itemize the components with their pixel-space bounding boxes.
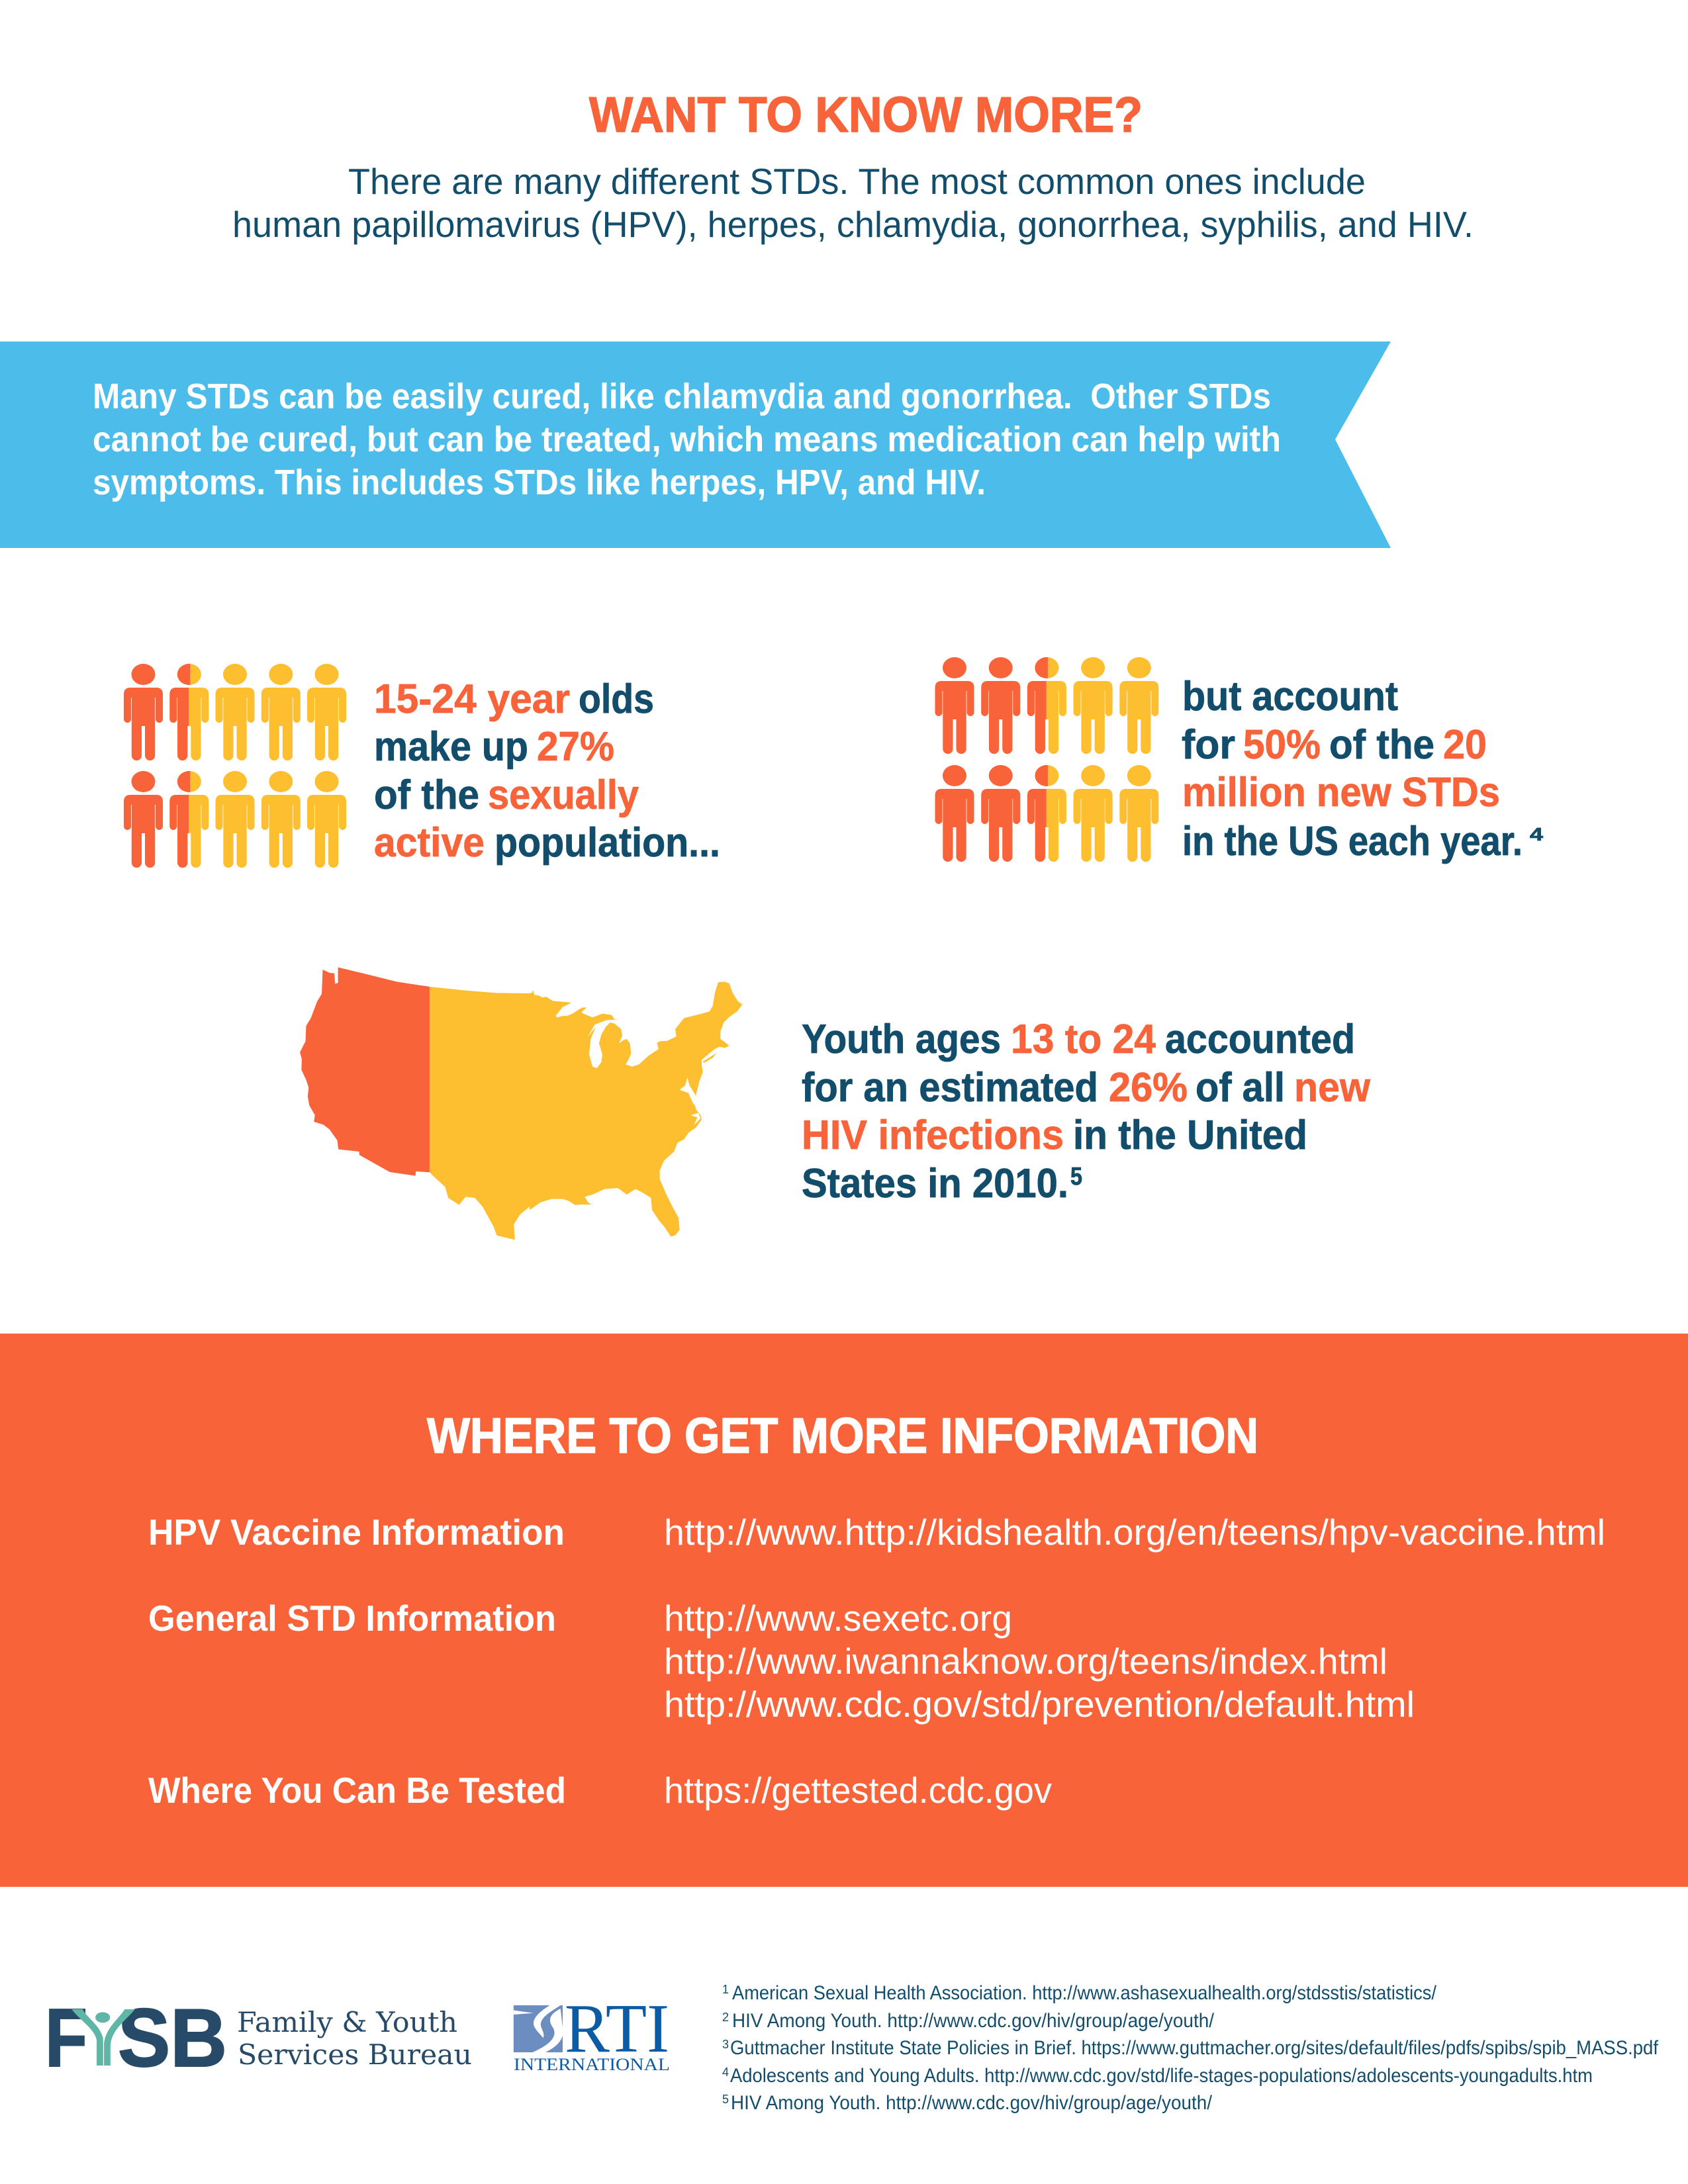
resource links: http://www.iwannaknow.org/teens/index.html — [664, 1641, 1387, 1682]
text: 15-24 year olds stat: 27% — [537, 724, 614, 770]
resource links: http://www.cdc.gov/std/prevention/default.html — [664, 1684, 1415, 1725]
footnotes: HIV Among Youth. http://www.cdc.gov/hiv/group/age/youth/ — [731, 2092, 1213, 2114]
text: youth HIV stat: Youth ages — [802, 1017, 1001, 1062]
text: 15-24 year olds stat: 15-24 year — [374, 676, 570, 722]
resource links: http://www.sexetc.org — [664, 1598, 1012, 1639]
text: youth HIV stat: accounted — [1165, 1017, 1355, 1062]
text: 50 percent of new STDs stat: in the US each year. — [1182, 819, 1523, 864]
banner text: symptoms. This includes STDs like herpes, HPV, and HIV. — [93, 463, 986, 502]
resource links: http://www.http://kidshealth.org/en/teens/hpv-vaccine.html — [664, 1512, 1605, 1553]
footnotes: 5 — [722, 2093, 729, 2106]
text: 15-24 year olds stat: active — [374, 820, 485, 866]
logo: FYSB Family and Youth Services Bureau: Services Bureau — [238, 2038, 472, 2071]
resource links — [664, 1512, 1605, 1811]
text: youth HIV stat: HIV infections — [802, 1113, 1064, 1158]
footnotes: 3 — [722, 2038, 729, 2051]
icon: left people array, 27 percent — [124, 664, 346, 868]
intro text: There are many different STDs. The most common ones include — [348, 161, 1366, 202]
logo: RTI International: RTI — [565, 1989, 669, 2067]
text: 15-24 year olds stat: olds — [579, 676, 654, 722]
text: 50 percent of new STDs stat: 20 — [1443, 722, 1487, 768]
intro text: human papillomavirus (HPV), herpes, chlamydia, gonorrhea, syphilis, and HIV. — [232, 204, 1474, 245]
logo: FYSB Family and Youth Services Bureau: SB — [118, 1993, 227, 2084]
banner text — [93, 377, 1281, 502]
text: 15-24 year olds stat: sexually — [488, 772, 639, 818]
logo: FYSB Family and Youth Services Bureau — [45, 1993, 472, 2084]
logo: FYSB Family and Youth Services Bureau: F — [45, 1993, 87, 2084]
panel: where to get more information — [0, 1334, 1688, 1887]
text: 15-24 year olds stat — [374, 676, 720, 866]
text: 50 percent of new STDs stat: million new STDs — [1182, 770, 1500, 815]
text: youth HIV stat: for an estimated — [802, 1065, 1098, 1111]
footnotes: Adolescents and Young Adults. http://www.cdc.gov/std/life-stages-populations/adolescents-youngadults.htm — [730, 2065, 1593, 2087]
footnotes: 2 — [722, 2011, 729, 2024]
text: youth HIV stat: new — [1294, 1065, 1371, 1111]
text: 50 percent of new STDs stat: 50% — [1243, 722, 1321, 768]
logo: RTI International — [514, 1989, 670, 2074]
text: youth HIV stat: States in 2010. — [802, 1161, 1068, 1206]
text: 50 percent of new STDs stat: of the — [1329, 722, 1434, 768]
logo: RTI International: INTERNATIONAL — [514, 2055, 670, 2074]
footnotes: HIV Among Youth. http://www.cdc.gov/hiv/group/age/youth/ — [732, 2010, 1215, 2032]
text: youth HIV stat: 13 to 24 — [1011, 1017, 1156, 1062]
resource labels — [148, 1512, 566, 1811]
resource labels: Where You Can Be Tested — [148, 1770, 566, 1811]
text: 50 percent of new STDs stat — [1182, 674, 1544, 864]
panel: blue ribbon banner — [0, 341, 1391, 548]
icon: right people array, 50 percent — [935, 657, 1158, 862]
panel heading: WHERE TO GET MORE INFORMATION — [427, 1408, 1258, 1463]
footnotes: 1 — [722, 1983, 729, 1996]
text: youth HIV stat: 5 — [1070, 1163, 1082, 1191]
text: youth HIV stat: 26% — [1109, 1065, 1188, 1111]
logo: FYSB Family and Youth Services Bureau: Family & Youth — [237, 2006, 457, 2038]
text: 50 percent of new STDs stat: but account — [1182, 674, 1398, 719]
intro text — [232, 161, 1474, 245]
text: 15-24 year olds stat: of the — [374, 772, 479, 818]
banner text: Many STDs can be easily cured, like chlamydia and gonorrhea. Other STDs — [93, 377, 1271, 416]
text: youth HIV stat — [802, 1017, 1371, 1206]
footnotes — [722, 1982, 1659, 2114]
resource labels: HPV Vaccine Information — [148, 1512, 565, 1553]
footnotes: American Sexual Health Association. http://www.ashasexualhealth.org/stdsstis/statistics/ — [732, 1982, 1437, 2004]
resource labels: General STD Information — [148, 1598, 556, 1639]
text: youth HIV stat: in the United — [1073, 1113, 1307, 1158]
footnotes: 4 — [722, 2066, 729, 2079]
text: 50 percent of new STDs stat: for — [1182, 722, 1235, 768]
map: United States — [300, 968, 743, 1240]
banner text: cannot be cured, but can be treated, which means medication can help with — [93, 420, 1281, 459]
text: 50 percent of new STDs stat: 4 — [1530, 824, 1544, 844]
text: 15-24 year olds stat: population... — [494, 820, 720, 866]
text: youth HIV stat: of all — [1196, 1065, 1285, 1111]
title: WANT TO KNOW MORE? — [589, 87, 1143, 142]
resource links: https://gettested.cdc.gov — [664, 1770, 1052, 1811]
text: 15-24 year olds stat: make up — [374, 724, 528, 770]
